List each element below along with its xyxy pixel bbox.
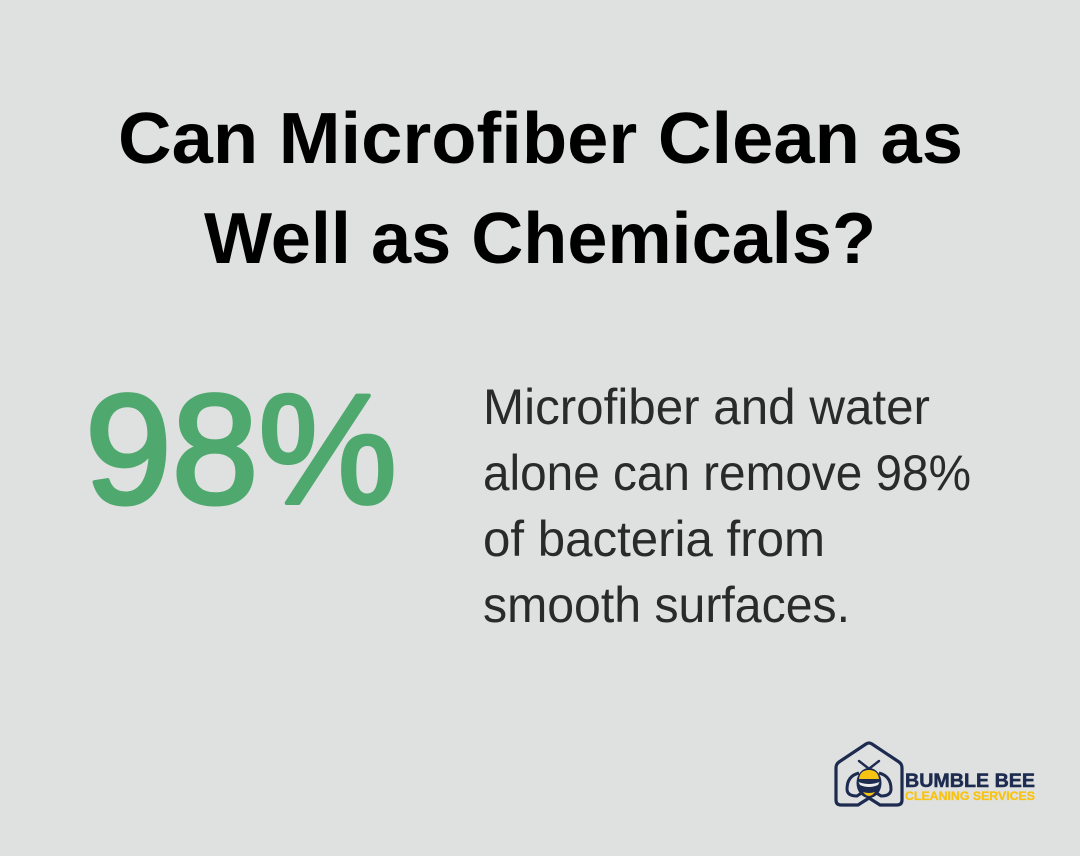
icon: house outline xyxy=(836,743,902,805)
icon: bee xyxy=(847,761,891,798)
title: Well as Chemicals? xyxy=(204,199,876,279)
description text: Microfiber and water xyxy=(483,379,930,435)
description text: alone can remove 98% xyxy=(483,445,971,501)
logo: Bumble Bee Cleaning Services xyxy=(836,743,1035,805)
title xyxy=(118,99,963,279)
description text: smooth surfaces. xyxy=(483,577,850,633)
logo tagline: CLEANING SERVICES xyxy=(905,789,1035,803)
title: Can Microfiber Clean as xyxy=(118,99,963,179)
description text xyxy=(483,379,971,633)
description text: of bacteria from xyxy=(483,511,825,567)
big statistic: 98%: 98% xyxy=(85,363,397,537)
logo wordmark: BUMBLE BEE xyxy=(905,770,1035,792)
